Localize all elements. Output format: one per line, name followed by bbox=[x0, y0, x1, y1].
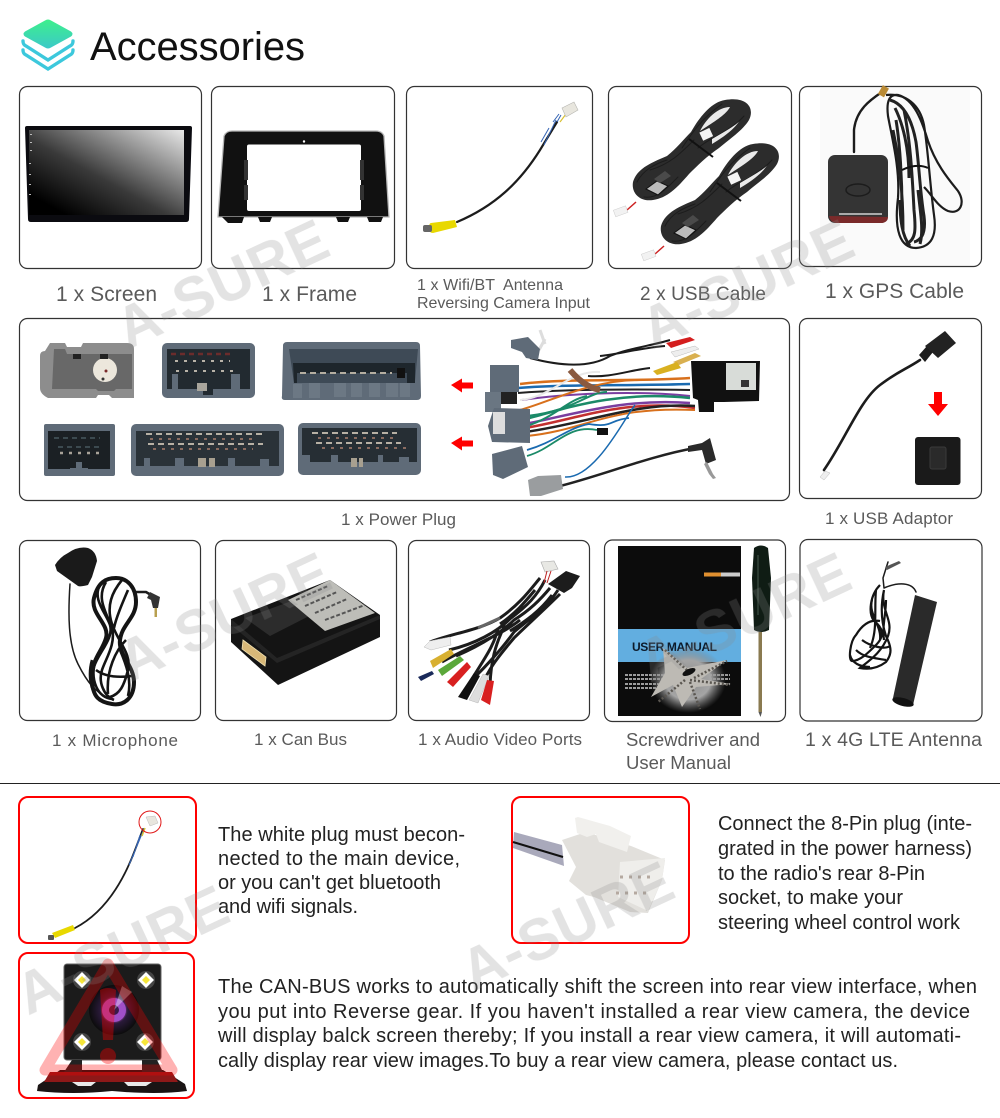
connector 2 bbox=[162, 343, 255, 398]
panel: screwdriver and manual bbox=[604, 540, 786, 722]
panel: frame bbox=[212, 86, 394, 268]
label: 1 x Power Plug: 1 x Power Plug bbox=[341, 510, 456, 529]
text: 8-pin plug note: Connect the 8-Pin plug (inte- bbox=[718, 813, 972, 835]
label: 1 x Screen: 1 x Screen bbox=[56, 283, 157, 306]
black adaptor block bbox=[915, 437, 960, 485]
screwdriver bbox=[752, 546, 771, 717]
label: wifi antenna and reversing camera input: Reversing Camera Input bbox=[417, 295, 591, 312]
watermarks: A-SURE: A-SURE bbox=[451, 849, 683, 1004]
callout: white plug image bbox=[19, 797, 196, 943]
user manual: USER MANUAL bbox=[632, 640, 717, 654]
panel: power plug bbox=[20, 318, 790, 500]
panel: usb cables bbox=[608, 86, 792, 268]
watermarks: A-SURE: A-SURE bbox=[108, 540, 340, 695]
plugs bbox=[511, 337, 540, 360]
screws bbox=[650, 647, 731, 713]
callout: 8-pin plug image bbox=[512, 797, 689, 943]
label: screwdriver and user manual: Screwdriver and bbox=[626, 729, 760, 750]
label: 1 x USB Adaptor: 1 x USB Adaptor bbox=[825, 509, 953, 528]
connector 4 bbox=[44, 424, 115, 476]
panel: gps cable bbox=[800, 85, 982, 266]
icon: layered stack bbox=[23, 20, 73, 69]
usb cable 1 bbox=[613, 99, 751, 217]
panel: can bus bbox=[216, 540, 396, 720]
watermarks: A-SURE: A-SURE bbox=[631, 207, 863, 362]
usb cable 2 bbox=[641, 143, 779, 261]
connector 1 bbox=[40, 343, 134, 398]
antenna jack bbox=[688, 438, 716, 464]
text: 8-pin plug note: steering wheel control work bbox=[718, 912, 961, 934]
text: 8-pin plug note: grated in the power harness) bbox=[718, 838, 972, 860]
label: 1 x Frame: 1 x Frame bbox=[262, 283, 357, 306]
heading: Accessories bbox=[23, 20, 305, 69]
text: white plug note: or you can't get bluetooth bbox=[218, 872, 441, 894]
text: white plug note: and wifi signals. bbox=[218, 896, 358, 918]
watermarks: A-SURE bbox=[6, 207, 863, 1028]
panel: wifi/bt antenna cable bbox=[406, 86, 592, 268]
text: white plug note bbox=[218, 824, 465, 918]
label: wifi antenna and reversing camera input: 1 x Wifi/BT Antenna bbox=[417, 277, 563, 294]
camera bracket bbox=[37, 1070, 187, 1093]
label: 1 x Audio Video Ports: 1 x Audio Video Ports bbox=[418, 730, 582, 749]
control box bbox=[691, 361, 760, 412]
text: white plug note: nected to the main device, bbox=[218, 848, 460, 870]
text: can-bus note: will display balck screen thereby; If you install a rear view camera, it will automati- bbox=[217, 1025, 961, 1047]
text: can-bus note: cally display rear view images.To buy a rear view camera, please contact us. bbox=[218, 1050, 898, 1072]
user manual bbox=[618, 546, 741, 716]
panel: audio video ports bbox=[408, 540, 590, 720]
text: can-bus note: you put into Reverse gear. If you haven't installed a rear view camera, the device bbox=[218, 1001, 970, 1023]
callout: rear camera warning image bbox=[19, 953, 194, 1098]
arrow: red down bbox=[928, 392, 948, 416]
label: 1 x GPS Cable: 1 x GPS Cable bbox=[825, 280, 964, 303]
camera body bbox=[64, 964, 161, 1060]
connector 3 bbox=[282, 342, 421, 400]
panel: 4g lte antenna bbox=[800, 540, 982, 721]
text: 8-pin plug note: socket, to make your bbox=[718, 887, 903, 909]
text: 8-pin plug note: to the radio's rear 8-Pin bbox=[718, 863, 925, 885]
text: can-bus note: The CAN-BUS works to automatically shift the screen into rear view interface, when bbox=[218, 976, 977, 998]
text: white plug note: The white plug must becon- bbox=[218, 824, 465, 846]
arrows: red left bbox=[451, 378, 473, 450]
watermarks: A-SURE: A-SURE bbox=[628, 540, 860, 695]
label: screwdriver and user manual: User Manual bbox=[626, 752, 731, 773]
label: 1 x 4G LTE Antenna: 1 x 4G LTE Antenna bbox=[805, 729, 982, 751]
label: 1 x Can Bus: 1 x Can Bus bbox=[254, 730, 347, 749]
rca plugs bbox=[424, 637, 451, 650]
watermarks: A-SURE: A-SURE bbox=[6, 873, 238, 1028]
watermarks: A-SURE: A-SURE bbox=[106, 207, 338, 362]
label: screwdriver and user manual bbox=[626, 729, 760, 773]
wiring harness bbox=[485, 330, 760, 496]
text: 8-pin plug note bbox=[718, 813, 972, 934]
small plug bbox=[597, 428, 608, 435]
cable bundle bbox=[430, 578, 560, 686]
label: 2 x USB Cable: 2 x USB Cable bbox=[640, 284, 766, 305]
panel: screen bbox=[20, 86, 202, 268]
connector 6 bbox=[298, 423, 421, 475]
text: can-bus note bbox=[217, 976, 977, 1072]
label: 1 x Microphone: 1 x Microphone bbox=[52, 731, 178, 750]
connector 5 bbox=[131, 424, 284, 476]
warning triangle bbox=[45, 964, 172, 1070]
title: Accessories bbox=[90, 25, 305, 69]
panel: microphone bbox=[20, 540, 200, 720]
rca plugs bbox=[666, 337, 695, 348]
panel: usb adaptor bbox=[800, 318, 982, 498]
label: wifi antenna and reversing camera input bbox=[417, 277, 591, 312]
